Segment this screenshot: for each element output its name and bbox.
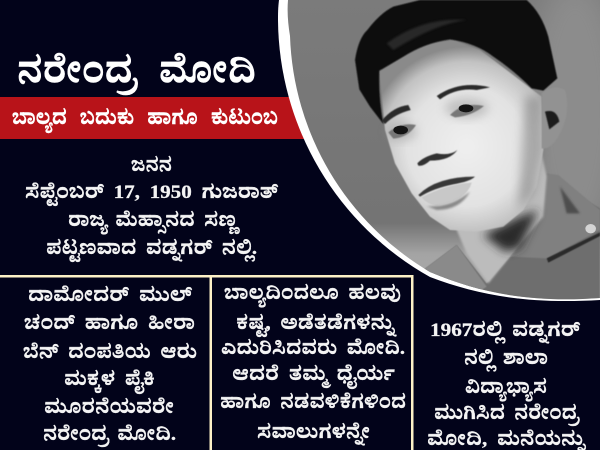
panel: childhood struggles text: ಎದುರಿಸಿದವರು ಮೋದಿ.: [221, 337, 405, 359]
birth details text block: ಜನನ: [131, 155, 172, 176]
red subtitle band: [0, 97, 305, 139]
panel: family text: ನರೇಂದ್ರ ಮೋದಿ.: [43, 423, 176, 447]
panel: education text: ನಲ್ಲಿ ಶಾಲಾ: [464, 348, 548, 371]
birth details text block: ರಾಜ್ಯ ಮೆಹ್ಸಾನದ ಸಣ್ಣ: [68, 209, 240, 235]
panel: childhood struggles text: ಹಾಗೂ ನಡವಳಿಕೆಗಳಿಂದ: [220, 391, 406, 413]
panel: childhood struggles text: [220, 283, 406, 446]
eyebrows: [382, 105, 411, 124]
panel: childhood struggles text: ಕಷ್ಟ, ಅಡೆತಡೆಗಳನ್ನು: [236, 312, 397, 337]
panel: family text: ಮಕ್ಕಳ ಪೈಕಿ: [64, 368, 155, 394]
photo: young boy portrait: [280, 0, 600, 310]
collar: [510, 173, 600, 258]
birth details text block: ಪಟ್ಟಣವಾದ ವಡ್ನಗರ್ ನಲ್ಲಿ.: [46, 238, 257, 262]
panel: education text: ಮುಗಿಸಿದ ನರೇಂದ್ರ: [434, 402, 580, 426]
hair highlights: [387, 20, 467, 50]
panel: family text: [23, 284, 197, 447]
lips: [418, 177, 475, 197]
birth details text block: ಸೆಪ್ಟೆಂಬರ್ 17, 1950 ಗುಜರಾತ್: [25, 181, 279, 206]
panel dividers: [0, 275, 414, 450]
subtitle: ಬಾಲ್ಯದ ಬದುಕು ಹಾಗೂ ಕುಟುಂಬ: [12, 107, 278, 133]
birth details text block: [25, 155, 279, 262]
neck: [457, 147, 547, 283]
panel: family text: ಮೂರನೆಯವರೇ: [44, 396, 174, 418]
ear: [542, 92, 549, 149]
eye socket shade: [387, 122, 417, 141]
panel: education text: ವಿದ್ಯಾಭ್ಯಾಸ: [465, 377, 547, 402]
white circular photo frame: [278, 0, 600, 301]
shirt: [424, 206, 600, 300]
panel: childhood struggles text: ಬಾಲ್ಯದಿಂದಲೂ ಹಲವು: [224, 283, 401, 308]
hair: [355, 0, 557, 124]
title: ನರೇಂದ್ರ ಮೋದಿ: [17, 50, 256, 95]
right face shade: [518, 97, 543, 210]
panel: childhood struggles text: ಆದರೆ ತಮ್ಮ ಧೈರ್ಯ: [232, 363, 395, 389]
panel: education text: ಮೋದಿ, ಮನೆಯನ್ನು: [427, 428, 588, 450]
panel: childhood struggles text: ಸವಾಲುಗಳನ್ನೇ: [257, 421, 370, 446]
panel: education text: [427, 320, 588, 450]
panel: family text: ಚಂದ್ ಹಾಗೂ ಹೀರಾ: [24, 313, 195, 334]
eyes: [388, 124, 416, 139]
panel: education text: 1967ರಲ್ಲಿ ವಡ್ನಗರ್: [430, 320, 581, 344]
panel: family text: ಬೆನ್ ದಂಪತಿಯ ಆರು: [23, 341, 197, 363]
face: [379, 40, 543, 232]
nose shadow: [417, 150, 457, 166]
panel: family text: ದಾಮೋದರ್ ಮುಲ್: [28, 284, 193, 306]
